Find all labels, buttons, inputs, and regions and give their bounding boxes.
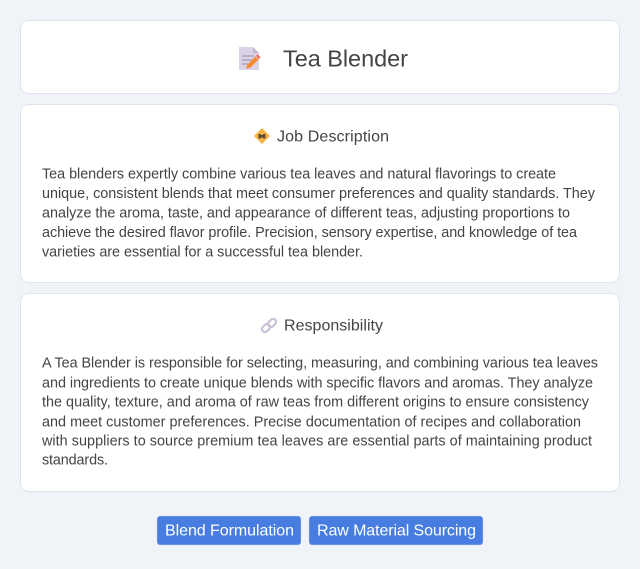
heading: job description: Job Description [277,128,389,146]
title text: Tea Blender [283,46,408,72]
responsibility text: A Tea Blender is responsible for selecting, measuring, and combining various tea leaves [42,356,598,372]
icon: link [261,318,277,333]
panel: job description [20,104,620,282]
responsibility text: standards. [42,452,108,468]
job description text: unique, consistent blends that meet consumer preferences and quality standards. They [42,186,596,202]
responsibility text: and meet customer preferences. Precise documentation of recipes and collaboration [42,414,581,430]
icon: memo and pencil [239,47,260,70]
tag: blend formulation [157,516,301,545]
responsibility text: and ingredients to create unique blends with specific flavors and aromas. They analyze [42,376,593,392]
icon: orange diamond [254,128,270,144]
heading: responsibility: Responsibility [284,318,383,334]
job description text: analyze the aroma, taste, and appearance of different teas, adjusting proportions to [42,206,570,222]
job description text: achieve the desired flavor profile. Precision, sensory expertise, and knowledge of tea [42,225,577,241]
tag: raw material sourcing: Raw Material Sourcing [317,522,476,540]
tag: raw material sourcing [309,516,483,545]
responsibility text [41,356,598,468]
job description text: Tea blenders expertly combine various tea leaves and natural flavorings to create [42,166,556,182]
responsibility text: the quality, texture, and aroma of raw teas from different origins to ensure consistency [42,394,590,410]
panel: responsibility [20,294,620,492]
tag: blend formulation: Blend Formulation [165,522,294,540]
panel: title [20,20,620,94]
responsibility text: with suppliers to source premium tea leaves are essential parts of maintaining product [41,434,592,450]
job description text [42,166,596,260]
job description text: varieties are essential for a successful tea blender. [42,244,363,260]
